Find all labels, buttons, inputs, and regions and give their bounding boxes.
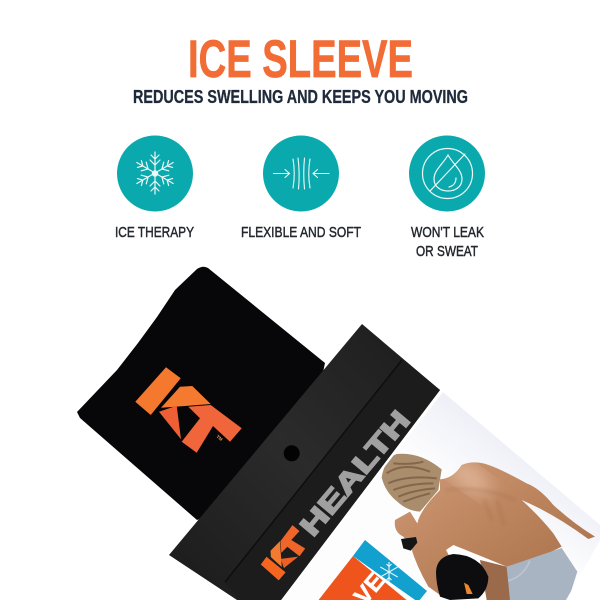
icon: label snowflake [380, 562, 398, 582]
package HEALTH text: HEALTH [294, 405, 416, 542]
product label [317, 540, 427, 600]
title: ICE SLEEVE [188, 30, 413, 89]
sleeve KT logo: TM [215, 434, 224, 442]
athlete photo [382, 454, 595, 600]
lower strip below seam [225, 359, 440, 600]
product card [318, 392, 600, 600]
sleeve KT logo [135, 367, 242, 453]
fold seam [225, 360, 402, 582]
black ice sleeve [77, 267, 325, 520]
subtitle: REDUCES SWELLING AND KEEPS YOU MOVING [133, 87, 468, 107]
icon: flexible arrows [263, 136, 339, 212]
label: ice therapy: ICE THERAPY [115, 224, 194, 241]
label: won't leak or sweat [411, 224, 484, 260]
label: won't leak or sweat: OR SWEAT [416, 243, 478, 260]
black package [169, 324, 440, 600]
label: won't leak or sweat: WON'T LEAK [411, 224, 484, 241]
icon: no leak [409, 136, 485, 212]
package KT logo [261, 525, 305, 580]
hang hole [284, 445, 300, 461]
icon: snowflake [117, 136, 193, 212]
label: flexible and soft: FLEXIBLE AND SOFT [241, 224, 361, 241]
